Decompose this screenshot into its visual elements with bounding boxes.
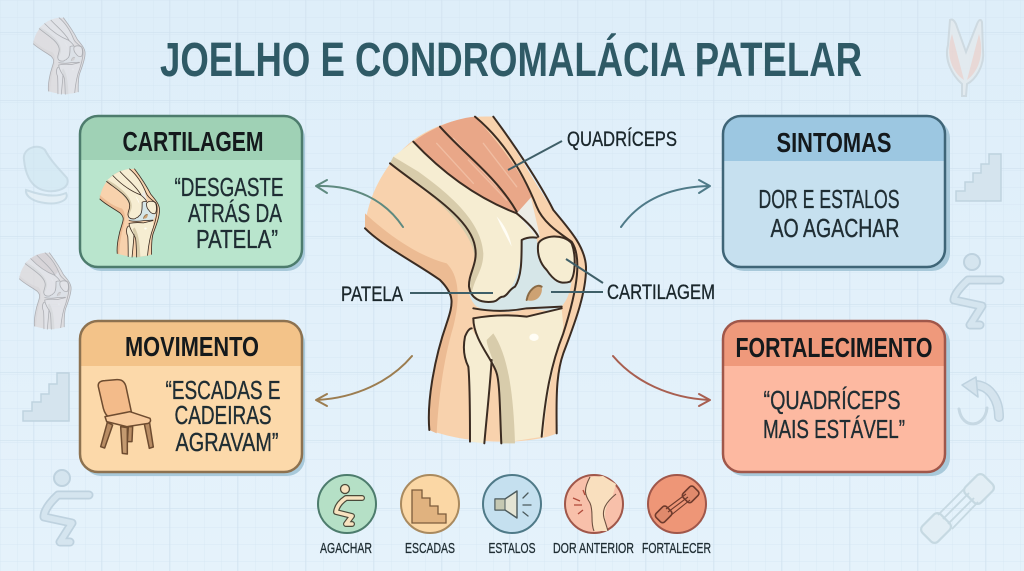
decorative icon: faded squat left <box>44 470 89 542</box>
icon: chair <box>98 380 153 454</box>
heading: movimento: MOVIMENTO <box>125 331 259 362</box>
panel: fortalecimento <box>723 321 950 476</box>
decorative icon: faded knee with muscle <box>19 253 71 329</box>
text: dor e estalos ao agachar <box>758 184 900 243</box>
label: quadríceps: QUADRÍCEPS <box>567 128 677 151</box>
arrow: knee to sintomas <box>621 180 710 227</box>
arrow: knee to fortalecimento <box>613 356 710 406</box>
text: escadas e cadeiras agravam: “ESCADAS E <box>166 375 280 405</box>
text: desgaste atrás da patela: PATELA” <box>196 224 278 254</box>
label: dor anterior: DOR ANTERIOR <box>553 540 634 557</box>
label: fortalecer: FORTALECER <box>642 540 711 557</box>
arrow: knee to movimento <box>316 356 412 406</box>
icon: escadas <box>401 475 459 533</box>
decorative icon: faded cartilage pad <box>24 147 68 203</box>
label: agachar: AGACHAR <box>320 540 372 557</box>
text: escadas e cadeiras agravam <box>166 375 280 457</box>
label: quadríceps <box>508 128 677 170</box>
knee illustration <box>365 116 586 443</box>
heading: sintomas: SINTOMAS <box>776 127 892 158</box>
text: quadríceps mais estável <box>763 385 905 444</box>
decorative icon: faded stairs right <box>956 154 1001 201</box>
decorative icon: faded squat right <box>954 254 1000 325</box>
decorative icon: faded rotation arrow <box>959 377 999 424</box>
label: patela: PATELA <box>341 283 403 306</box>
text: quadríceps mais estável: MAIS ESTÁVEL” <box>763 414 905 444</box>
heading: fortalecimento: FORTALECIMENTO <box>736 332 932 363</box>
icon: agachar <box>318 475 376 533</box>
label: cartilagem: CARTILAGEM <box>607 281 715 304</box>
label: estalos: ESTALOS <box>488 540 536 557</box>
text: dor e estalos ao agachar: AO AGACHAR <box>770 213 900 243</box>
decorative icon: faded stairs left <box>23 373 69 421</box>
icon: dor anterior <box>565 475 623 533</box>
text: desgaste atrás da patela: “DESGASTE <box>174 172 284 202</box>
arrow: knee to cartilagem <box>316 180 403 227</box>
panel: movimento <box>80 321 305 476</box>
text: escadas e cadeiras agravam: AGRAVAM” <box>176 427 278 457</box>
panel: sintomas <box>723 116 950 271</box>
label: escadas: ESCADAS <box>405 540 455 557</box>
decorative icon: faded knee top left <box>33 18 85 94</box>
label: cartilagem <box>551 259 715 304</box>
icon: fortalecer <box>648 475 706 533</box>
icon: estalos <box>483 475 541 533</box>
decorative icon: faded expander <box>919 472 996 545</box>
text: desgaste atrás da patela <box>174 172 284 254</box>
text: desgaste atrás da patela: ATRÁS DA <box>188 198 282 228</box>
text: quadríceps mais estável: “QUADRÍCEPS <box>764 385 900 415</box>
panel: cartilagem <box>80 116 305 271</box>
heading: cartilagem: CARTILAGEM <box>122 126 264 157</box>
decorative icon: faded muscle <box>947 20 983 96</box>
icon: mini knee <box>100 169 160 257</box>
text: dor e estalos ao agachar: DOR E ESTALOS <box>758 184 900 214</box>
text: escadas e cadeiras agravam: CADEIRAS <box>174 400 272 430</box>
